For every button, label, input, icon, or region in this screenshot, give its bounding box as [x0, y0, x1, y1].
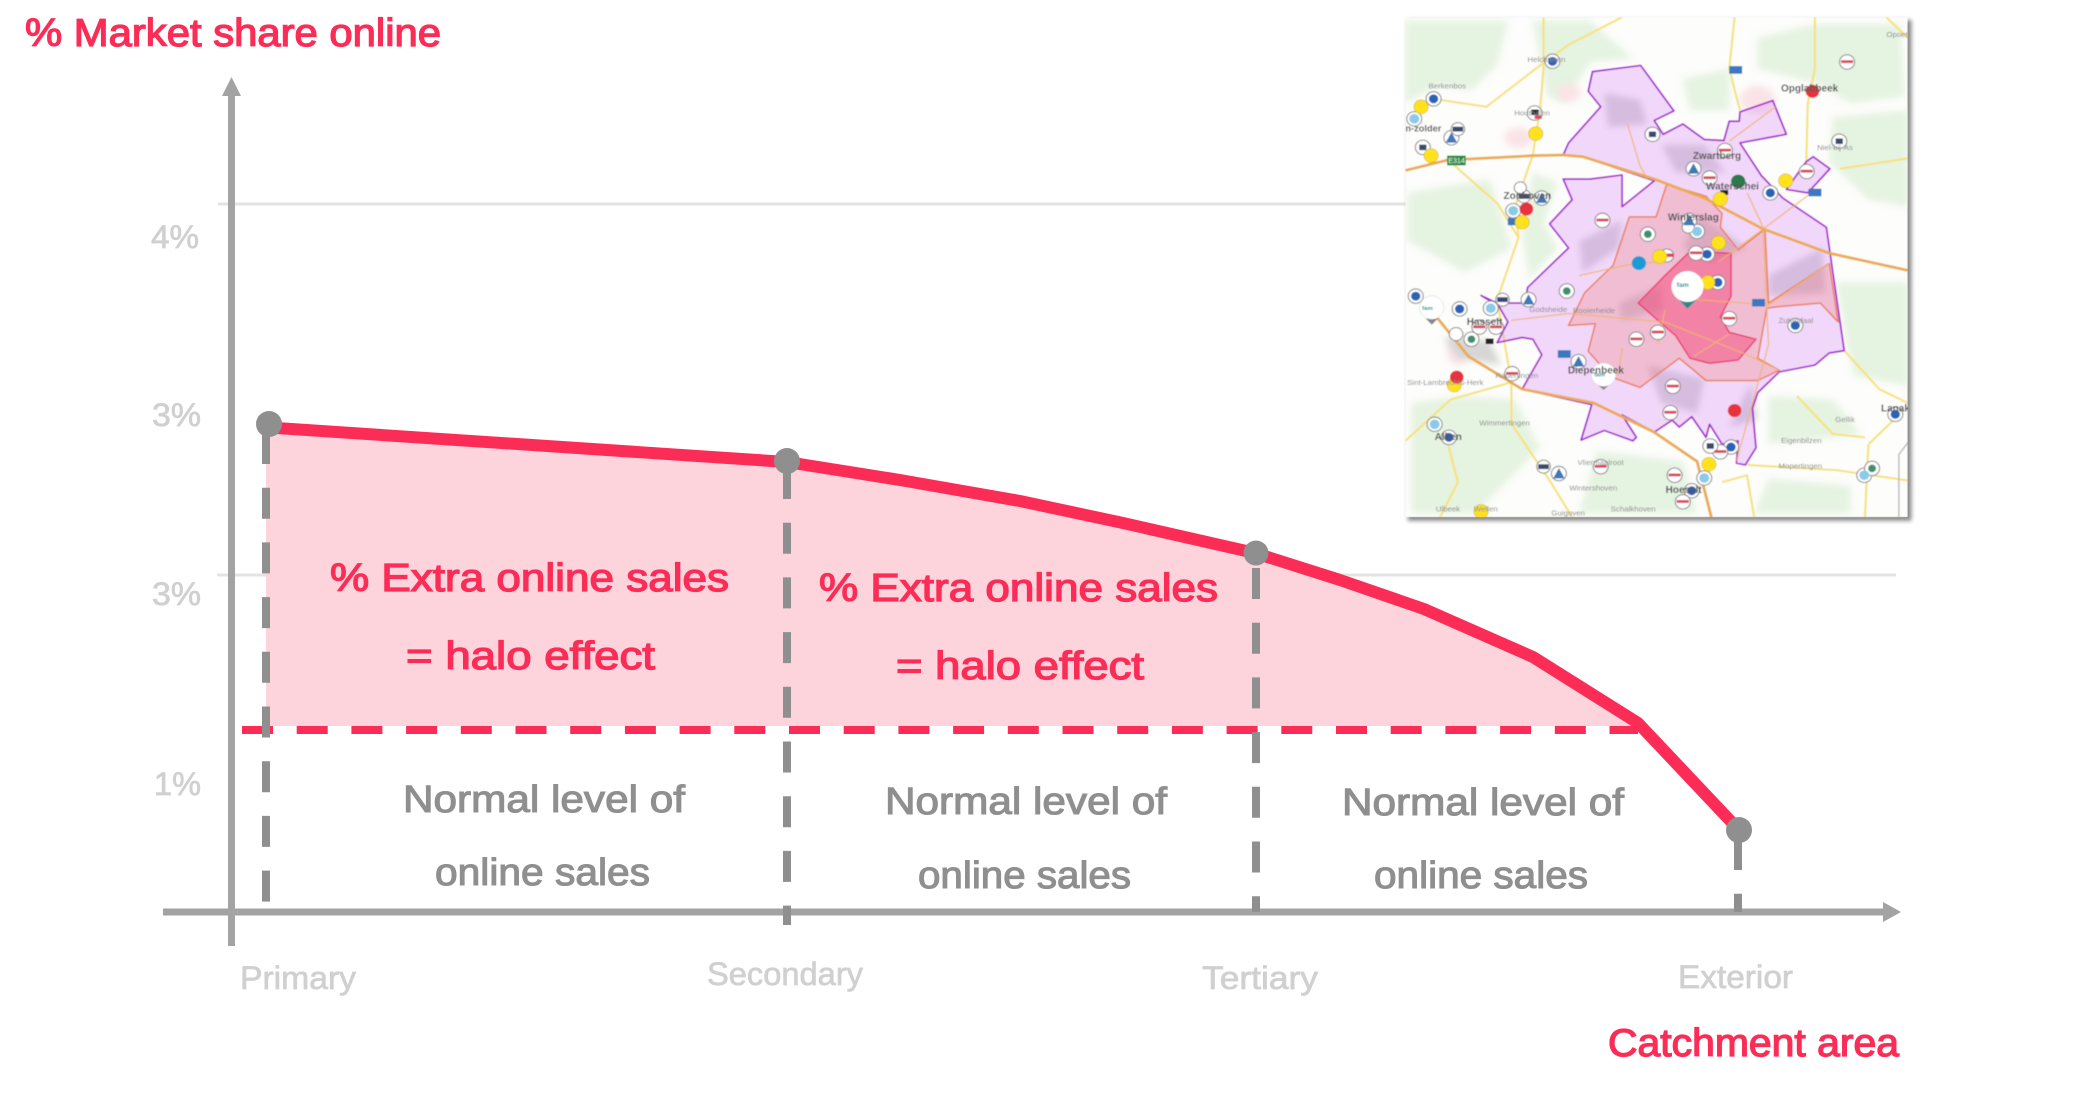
- curve data points: [256, 411, 1752, 843]
- x axis zone labels: Primary: [240, 960, 356, 996]
- marker pins: [1407, 54, 1903, 509]
- normal sales label: secondary zone: online sales: [918, 855, 1131, 897]
- inner roads: [1511, 107, 1829, 461]
- normal sales label: primary zone: [403, 779, 685, 894]
- catchment area map: [1405, 17, 1923, 521]
- primary catchment polygons: [1481, 65, 1844, 465]
- halo label: primary zone: [330, 557, 729, 678]
- place names: Gellik: [1835, 415, 1855, 424]
- y axis title: % Market share online: [25, 12, 441, 55]
- halo label: primary zone: = halo effect: [406, 635, 655, 678]
- town names: Zwartberg: [1693, 151, 1741, 162]
- halo label: primary zone: % Extra online sales: [330, 557, 729, 600]
- y axis tick labels: 3%: [152, 397, 201, 433]
- place names: Schalkhoven: [1611, 505, 1656, 513]
- road shields: [1447, 66, 1821, 358]
- place names: Ulbeek: [1436, 505, 1460, 513]
- store pins: large: [1420, 271, 1704, 390]
- place names: Vliermaalroot: [1577, 458, 1625, 467]
- x axis zone labels: Secondary: [707, 956, 863, 992]
- x axis zone labels: Tertiary: [1202, 960, 1318, 996]
- place names: Wimmertingen: [1479, 419, 1530, 428]
- halo label: secondary zone: % Extra online sales: [819, 567, 1218, 610]
- town names: Lanaken: [1881, 404, 1922, 415]
- place names: Sint-Lambrechts-Herk: [1407, 378, 1484, 387]
- x axis title: Catchment area: [1608, 1022, 1899, 1065]
- town names: Hasselt: [1467, 317, 1503, 328]
- place names: Opoeteren: [1886, 30, 1923, 39]
- x axis zone labels: Exterior: [1678, 959, 1793, 995]
- y axis tick labels: [151, 219, 201, 802]
- place names: Zutendaal: [1779, 316, 1814, 325]
- zone boundary: secondary: [783, 468, 791, 925]
- town names: Winterslag: [1668, 213, 1719, 223]
- store pins: large: fam: [1594, 373, 1605, 378]
- zone boundary: tertiary: [1252, 568, 1260, 912]
- secondary catchment polygon: [1569, 184, 1838, 387]
- place names: Godsheide: [1529, 305, 1567, 314]
- normal level dashed line: [242, 726, 1638, 734]
- tertiary catchment polygon: [1638, 251, 1756, 363]
- normal sales label: secondary zone: Normal level of: [885, 781, 1167, 823]
- town names: [1405, 84, 1922, 496]
- place names: Rapertingen: [1495, 371, 1538, 380]
- store pins: large: fam: [1677, 282, 1689, 289]
- x axis zone labels: [240, 956, 1793, 996]
- y axis tick labels: 4%: [151, 219, 199, 255]
- town names: Zonhoven: [1504, 191, 1551, 202]
- place names: Helchteren: [1527, 55, 1565, 64]
- place names: Berkenbos: [1429, 82, 1466, 90]
- zone boundary: exterior: [1734, 839, 1742, 912]
- town names: Waterschei: [1706, 182, 1759, 192]
- y axis tick labels: 3%: [152, 576, 201, 612]
- halo label: secondary zone: [819, 567, 1218, 688]
- place names: Wintershoven: [1569, 484, 1617, 492]
- y axis with arrow: [222, 77, 241, 946]
- place names: Niel-bij-As: [1817, 143, 1853, 152]
- normal sales label: tertiary zone: online sales: [1374, 855, 1588, 897]
- town names: Alken: [1435, 432, 1462, 443]
- store pins: large: fam: [1422, 306, 1433, 312]
- town names: Diepenbeek: [1568, 366, 1624, 377]
- x axis with arrow: [163, 902, 1901, 922]
- zone boundary: primary: [262, 433, 270, 902]
- halo effect shaded area: [266, 428, 1638, 726]
- road shields: E314: [1448, 158, 1465, 165]
- place names: Wellen: [1474, 505, 1498, 513]
- town names: Hoeselt: [1666, 485, 1703, 496]
- place names: Houthalen: [1514, 109, 1550, 117]
- normal sales label: tertiary zone: [1342, 782, 1624, 897]
- town names: Opglabbeek: [1781, 84, 1839, 95]
- market share curve: [269, 428, 1739, 830]
- place names: Guigoven: [1551, 509, 1585, 518]
- normal sales label: primary zone: online sales: [435, 852, 650, 894]
- place names: Rooierheide: [1573, 306, 1615, 315]
- normal sales label: tertiary zone: Normal level of: [1342, 782, 1624, 824]
- motorways: [1405, 155, 1908, 517]
- y axis tick labels: 1%: [154, 766, 201, 802]
- place names: Mopertingen: [1779, 462, 1822, 471]
- place names: Eigenbilzen: [1781, 436, 1822, 445]
- halo label: secondary zone: = halo effect: [896, 645, 1144, 688]
- normal sales label: primary zone: Normal level of: [403, 779, 685, 821]
- normal sales label: secondary zone: [885, 781, 1167, 897]
- place names: [1407, 30, 1923, 518]
- town names: n-zolder: [1405, 124, 1442, 134]
